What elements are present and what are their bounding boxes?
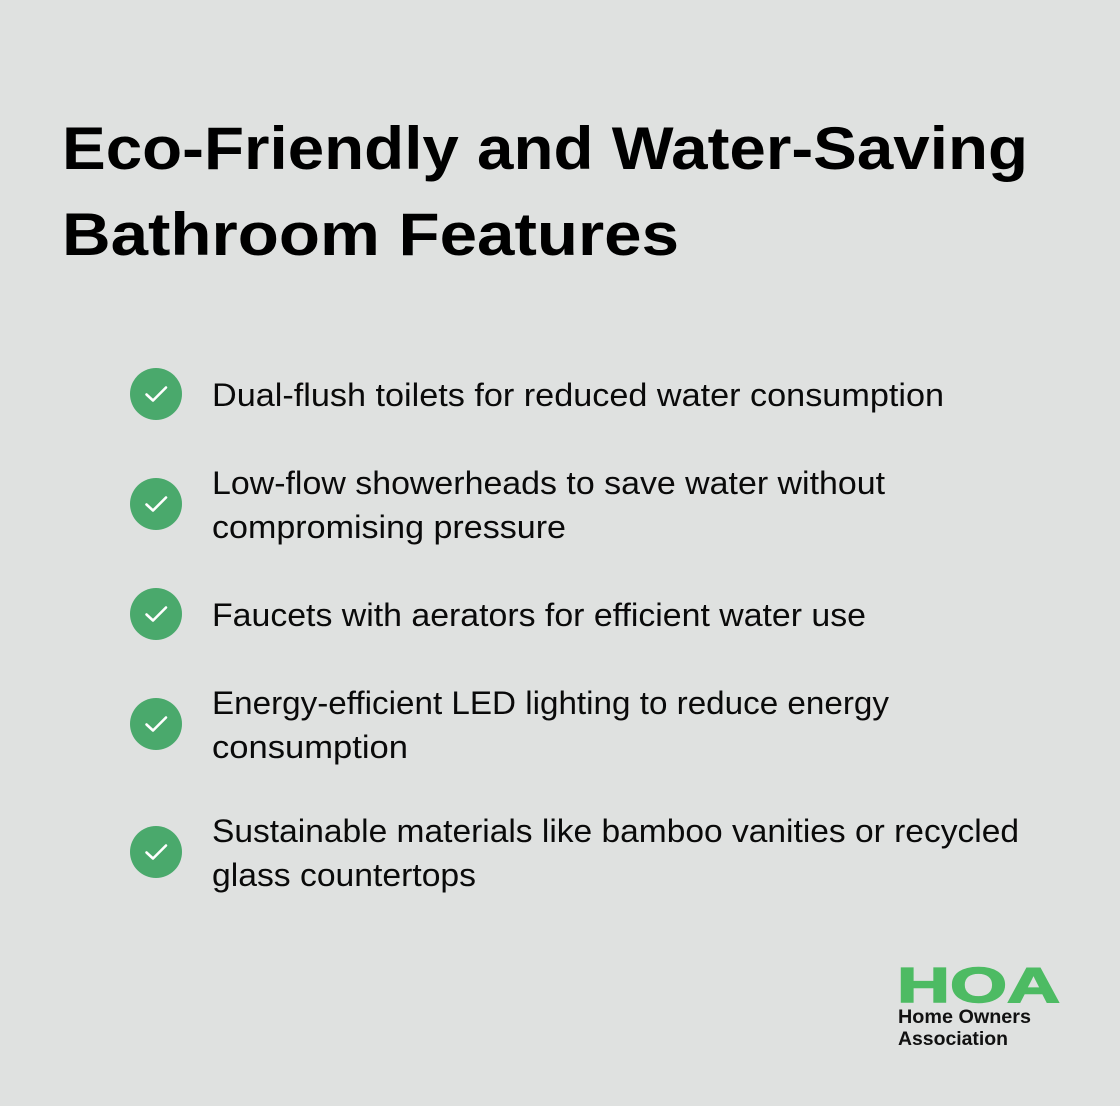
item 5 text: Sustainable materials like bamboo vanities or recycled [212, 813, 1019, 849]
item 2 text [212, 465, 885, 545]
title [62, 115, 1028, 268]
logo name [898, 1007, 1031, 1050]
logo: HOA Home Owners Association [897, 959, 1060, 1050]
item 3: faucets with aerators [130, 588, 866, 640]
item 5 text: glass countertops [212, 857, 476, 893]
item 2 text: compromising pressure [212, 509, 566, 545]
item 3 text: Faucets with aerators for efficient water use [212, 597, 866, 633]
title: Bathroom Features [62, 201, 679, 268]
item 5: sustainable materials [130, 813, 1019, 893]
item 4 text [212, 685, 890, 765]
item 2: low-flow showerheads [130, 465, 885, 545]
icon: check 2 [130, 478, 182, 530]
icon: check 3 [130, 588, 182, 640]
item 5 text [212, 813, 1019, 893]
logo name: Home Owners [898, 1007, 1031, 1028]
logo name: Association [898, 1029, 1008, 1050]
item 4: LED lighting [130, 685, 890, 765]
item 1: dual-flush toilets [130, 368, 944, 420]
logo letters HOA: HOA [897, 959, 1060, 1013]
icon: check 5 [130, 826, 182, 878]
title: Eco-Friendly and Water-Saving [62, 115, 1028, 182]
item 2 text: Low-flow showerheads to save water without [212, 465, 885, 501]
icon: check 4 [130, 698, 182, 750]
item 1 text: Dual-flush toilets for reduced water consumption [212, 377, 944, 413]
icon: check 1 [130, 368, 182, 420]
item 4 text: consumption [212, 729, 408, 765]
item 4 text: Energy-efficient LED lighting to reduce energy [212, 685, 890, 721]
checklist [130, 368, 1019, 893]
